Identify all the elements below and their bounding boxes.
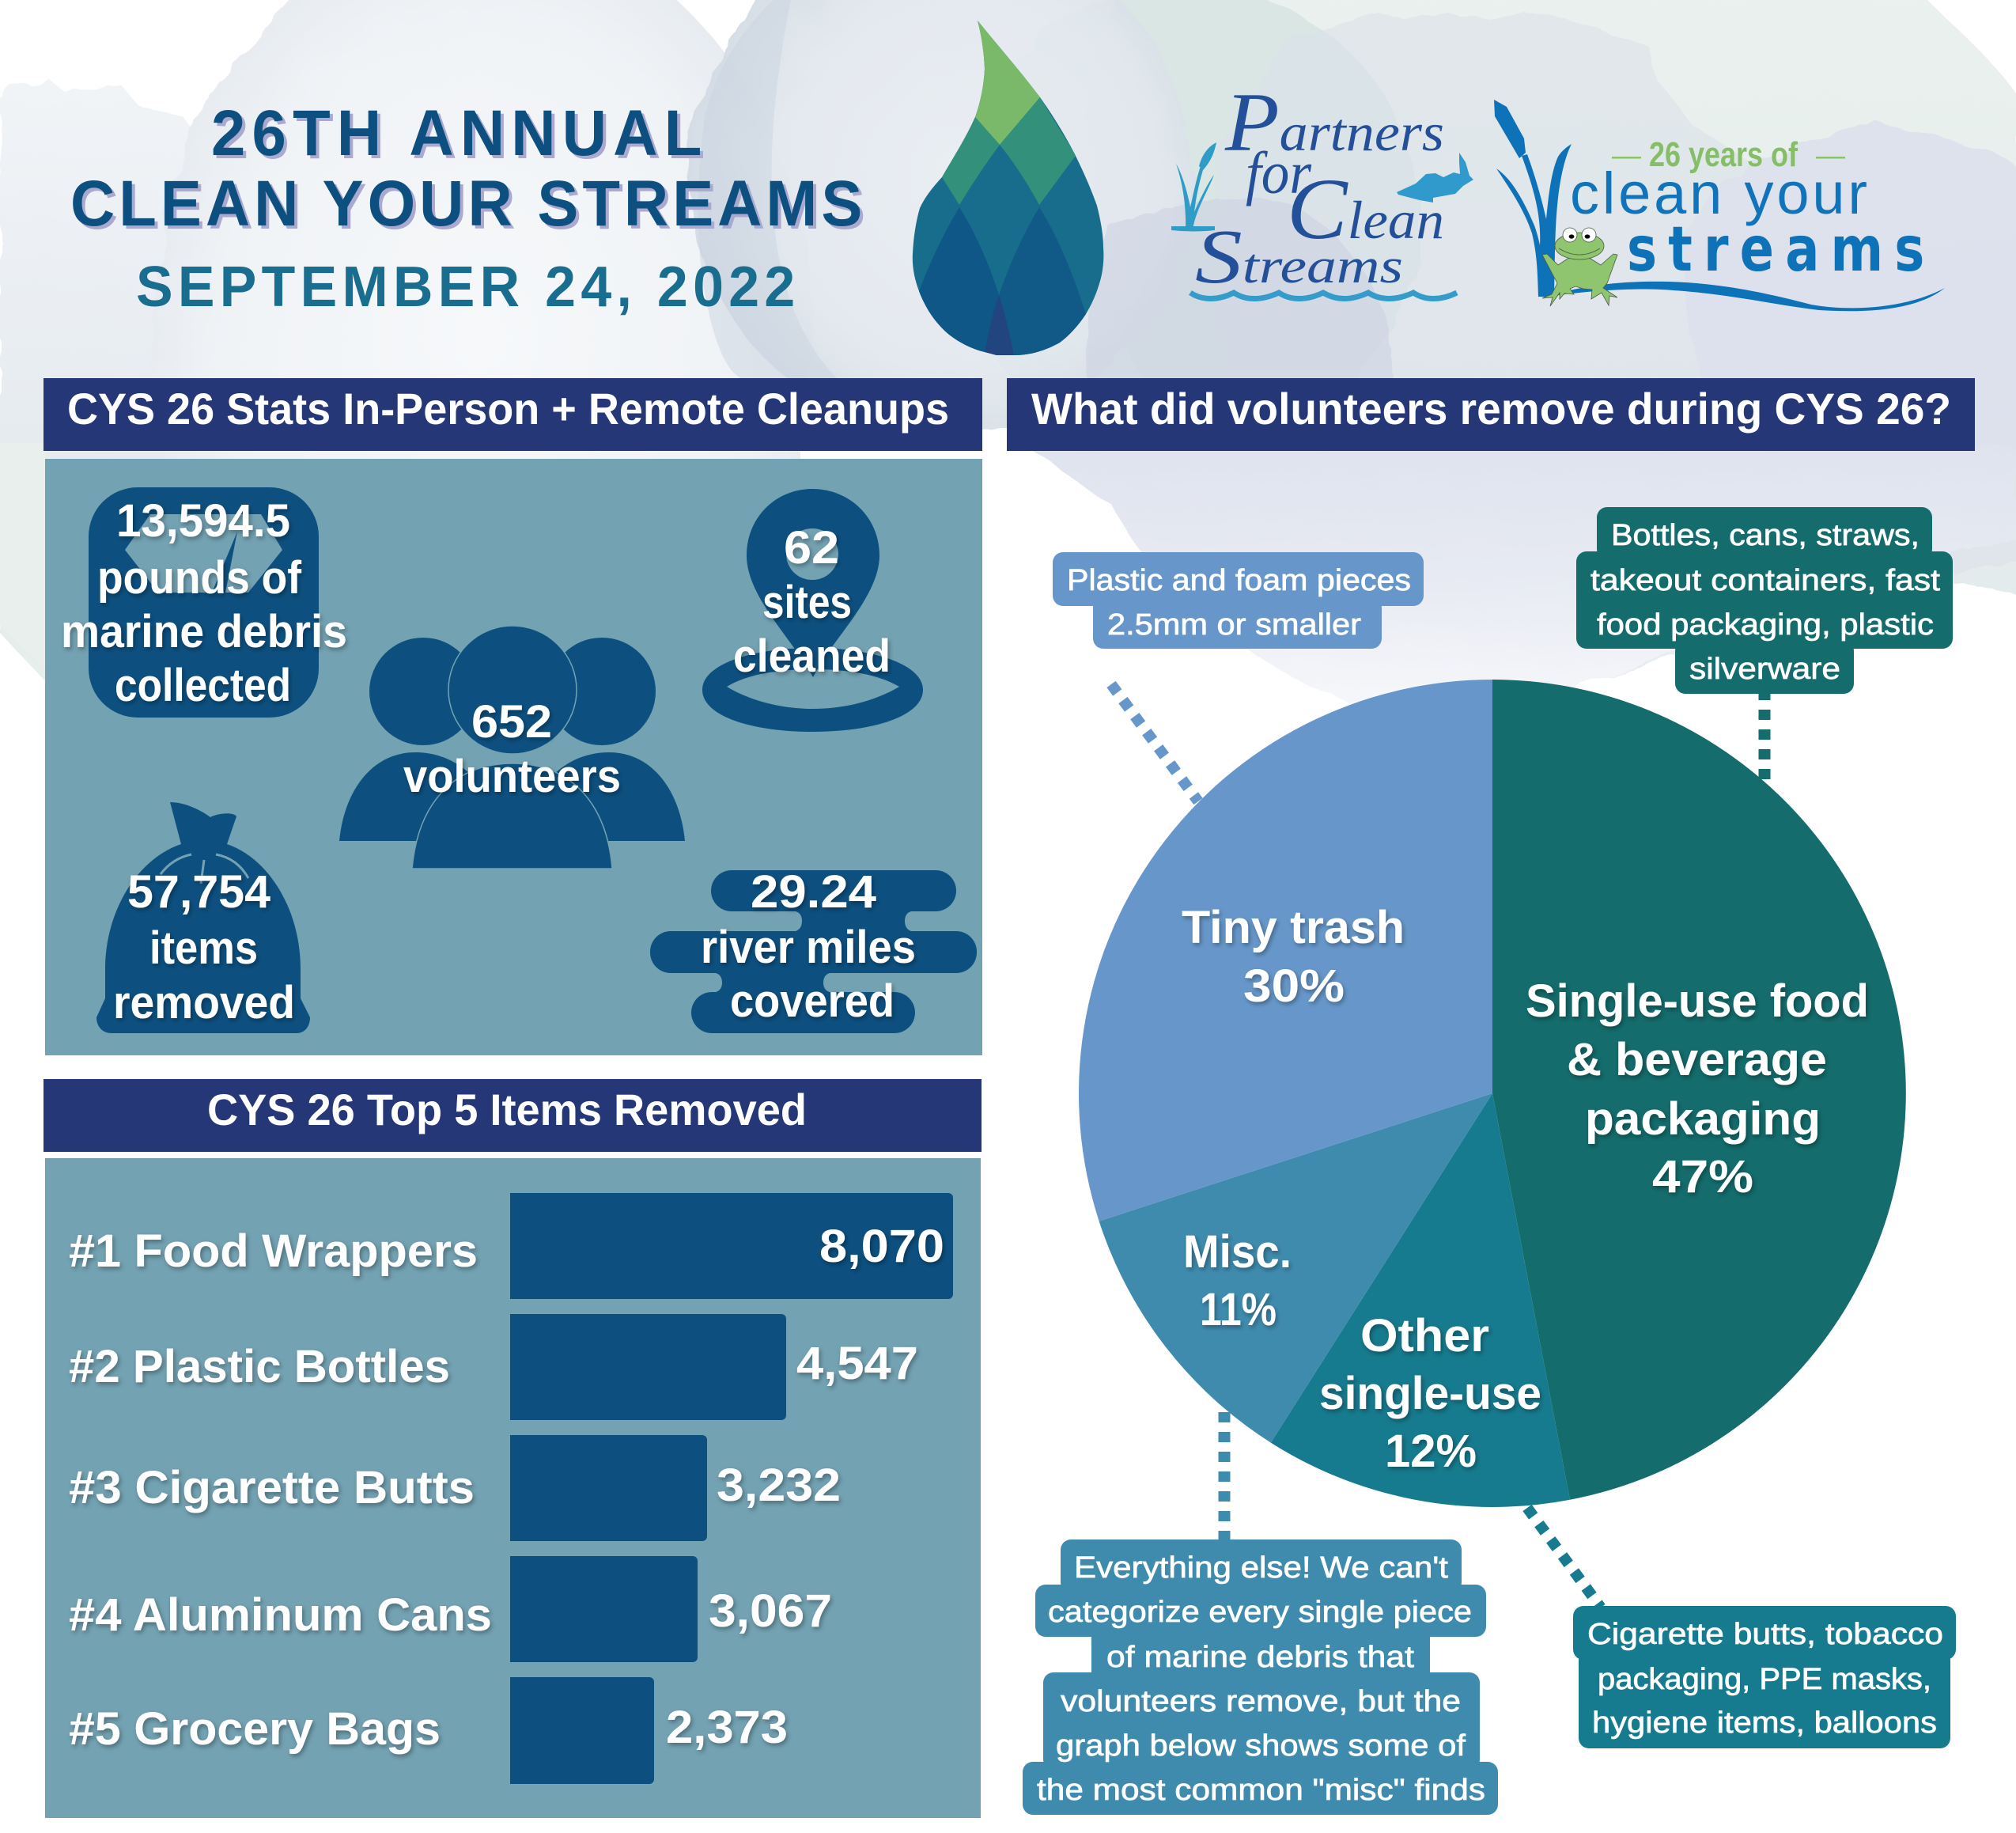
callout: misc: of marine debris that xyxy=(1106,1641,1414,1674)
callout: misc: the most common "misc" finds xyxy=(1037,1774,1485,1807)
header: pie question: What did volunteers remove during CYS 26? xyxy=(1031,384,1951,434)
title: 26TH ANNUAL xyxy=(214,100,705,172)
logo text: Clean xyxy=(1287,161,1444,257)
logo text: Streams xyxy=(1195,214,1403,300)
header: top 5 xyxy=(43,1079,982,1152)
callout: misc: Everything else! We can't xyxy=(1074,1551,1448,1585)
logo clean your: clean your xyxy=(1570,161,1867,226)
bar values xyxy=(666,1221,944,1753)
logo swoosh xyxy=(1542,282,1945,311)
pie chart xyxy=(1079,680,1906,1507)
icon: people xyxy=(339,626,685,869)
stat: pounds of debris: marine debris xyxy=(61,606,347,657)
callout: single-use food: takeout containers, fast xyxy=(1590,564,1940,597)
callout: other single-use xyxy=(1573,1606,1956,1748)
stat: river miles: 29.24 xyxy=(751,866,876,918)
header: pie question xyxy=(1007,378,1975,451)
callout: tiny trash xyxy=(1053,552,1424,649)
stat: sites xyxy=(702,489,923,732)
callout: misc: categorize every single piece xyxy=(1048,1596,1472,1629)
stat: volunteers: volunteers xyxy=(403,751,621,802)
callout: single-use food: silverware xyxy=(1689,653,1840,686)
bars xyxy=(510,1193,953,1784)
header: stats xyxy=(43,378,982,451)
callout: tiny trash: 2.5mm or smaller xyxy=(1107,608,1361,642)
bar labels: #2 Plastic Bottles xyxy=(69,1341,450,1392)
slice: other single-use 12% xyxy=(1271,1093,1570,1507)
logo text: for xyxy=(1246,140,1311,206)
slice: misc 11% xyxy=(1099,1093,1492,1443)
stat: river miles: river miles xyxy=(701,922,916,973)
stat: sites: sites xyxy=(762,577,852,628)
stat: items removed: 57,754 xyxy=(127,866,270,918)
pie labels: single-use xyxy=(1319,1368,1541,1419)
callout: misc: volunteers remove, but the xyxy=(1061,1685,1461,1718)
pie labels: 30% xyxy=(1243,960,1345,1012)
stat: pounds of debris: pounds of xyxy=(97,552,302,604)
stat: sites: cleaned xyxy=(733,631,891,682)
title: SEPTEMBER 24, 2022 xyxy=(136,256,795,319)
logo big cattail xyxy=(1494,100,1572,297)
icon: water drop xyxy=(913,21,1104,355)
callout: misc: graph below shows some of xyxy=(1056,1729,1466,1763)
bar values: 4,547 xyxy=(796,1338,918,1389)
stat: pounds of debris: collected xyxy=(115,660,291,711)
connector: single-use food xyxy=(1759,694,1770,779)
stat: pounds of debris xyxy=(61,487,347,718)
callout: other single-use: hygiene items, balloons xyxy=(1592,1706,1937,1740)
logo waves xyxy=(1190,293,1457,299)
callout: single-use food: Bottles, cans, straws, xyxy=(1611,519,1920,552)
stat: pounds of debris: 13,594.5 xyxy=(116,495,290,547)
bar labels: #3 Cigarette Butts xyxy=(69,1462,475,1513)
title xyxy=(70,97,865,319)
bar values: 3,232 xyxy=(717,1460,841,1511)
icon: weight xyxy=(89,487,319,718)
pie labels: Tiny trash xyxy=(1182,902,1405,953)
stat: river miles: covered xyxy=(730,975,895,1027)
stat: items removed xyxy=(96,802,310,1033)
logo streams: streams xyxy=(1627,214,1924,286)
pie labels: 47% xyxy=(1652,1151,1753,1202)
icon: river xyxy=(650,870,977,1033)
stat: items removed: removed xyxy=(113,977,295,1028)
logo years text: 26 years of xyxy=(1649,135,1798,174)
header: stats: CYS 26 Stats In-Person + Remote Cleanups xyxy=(67,384,949,434)
callout: single-use food: food packaging, plastic xyxy=(1597,608,1934,642)
slice: tiny trash 30% xyxy=(1079,680,1492,1221)
bar labels: #1 Food Wrappers xyxy=(69,1225,478,1277)
pie labels: Single-use food xyxy=(1526,975,1869,1027)
bar values: 8,070 xyxy=(819,1221,944,1272)
title: 26TH ANNUAL xyxy=(211,97,702,169)
connector: other single-use xyxy=(1527,1508,1601,1608)
bar values: 2,373 xyxy=(666,1702,788,1753)
pie labels: Misc. xyxy=(1183,1226,1292,1278)
callout: single-use food xyxy=(1576,507,1953,694)
title: CLEAN YOUR STREAMS xyxy=(74,170,865,242)
icon: frog xyxy=(1542,228,1617,306)
pie labels: packaging xyxy=(1585,1093,1821,1145)
pie labels: 11% xyxy=(1200,1284,1277,1335)
logo: 26 years of clean your streams xyxy=(1494,100,1945,311)
stat: volunteers xyxy=(339,626,685,869)
title: CLEAN YOUR STREAMS xyxy=(70,167,862,239)
icon: trash bag xyxy=(96,802,310,1033)
panel: stats xyxy=(45,459,982,1055)
callout: other single-use: Cigarette butts, tobacco xyxy=(1587,1618,1943,1651)
pie labels: Other xyxy=(1360,1310,1489,1361)
icon: map pin xyxy=(702,489,923,732)
stat: items removed: items xyxy=(149,922,258,974)
connector: tiny trash xyxy=(1111,684,1198,801)
slice: single-use food 47% xyxy=(1492,680,1906,1500)
bar labels: #4 Aluminum Cans xyxy=(69,1589,492,1641)
callout: tiny trash: Plastic and foam pieces xyxy=(1067,564,1411,597)
pie labels: & beverage xyxy=(1567,1034,1827,1085)
logo small cattail xyxy=(1171,142,1216,231)
logo text xyxy=(1195,76,1444,300)
bar labels: #5 Grocery Bags xyxy=(69,1703,441,1755)
header: top 5: CYS 26 Top 5 Items Removed xyxy=(207,1085,807,1134)
pie labels xyxy=(1182,902,1869,1477)
connector: misc xyxy=(1218,1412,1231,1541)
callout: misc xyxy=(1023,1539,1498,1815)
stat: sites: 62 xyxy=(784,522,839,574)
bar labels xyxy=(69,1225,492,1755)
stat: river miles xyxy=(650,866,977,1033)
stat: volunteers: 652 xyxy=(471,696,552,748)
logo lake xyxy=(1397,153,1473,203)
logo text: Partners xyxy=(1224,76,1444,169)
watercolor background xyxy=(0,0,2016,759)
logo: Partners for Clean Streams xyxy=(1171,76,1473,300)
bar values: 3,067 xyxy=(709,1585,832,1637)
pie labels: 12% xyxy=(1385,1426,1477,1477)
panel: top 5 bar chart xyxy=(45,1158,981,1818)
callout: other single-use: packaging, PPE masks, xyxy=(1598,1663,1931,1696)
